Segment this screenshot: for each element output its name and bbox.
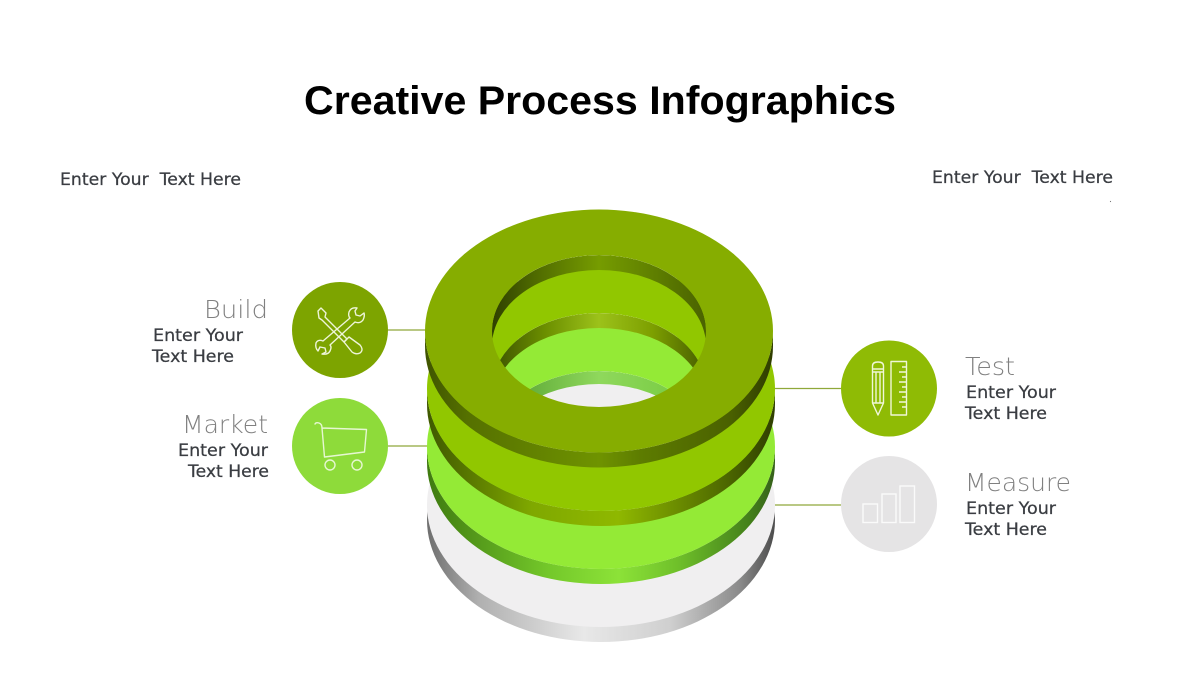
connector lines [388,330,841,505]
text: build description: Enter Your [153,326,243,346]
title: Creative Process Infographics [304,79,896,123]
text: measure description: Enter Your [966,499,1056,519]
icon: wrench and screwdriver [316,308,364,354]
text block: top left: Enter Your Text Here [60,170,241,190]
base disc: measure [427,383,775,642]
text: market description: Enter Your [178,441,268,461]
circle: build [292,282,388,378]
text: test description: Enter Your [966,383,1056,403]
ring one: build [425,209,773,468]
label: test: Test [965,352,1015,381]
text: test description [964,383,1056,424]
label: build: Build [204,295,268,324]
text: test description: Text Here [964,404,1047,424]
stacked ring diagram [425,209,775,642]
ring three: market [427,325,775,584]
circle: measure [841,456,937,552]
icon: shopping cart [315,423,366,470]
ring two: test [427,267,775,526]
circle: market [292,398,388,494]
label: measure: Measure [965,468,1071,497]
label: market: Market [182,410,268,439]
text: measure description: Text Here [964,520,1047,540]
text: market description: Text Here [187,462,269,482]
text block: top right: Enter Your Text Here [932,168,1113,188]
text: measure description [964,499,1056,540]
callout: test [841,340,1056,436]
text: build description: Text Here [151,347,234,367]
text: build description [151,326,243,367]
icon: bar chart [863,486,914,522]
tiny dot [1110,201,1111,202]
text: market description [178,441,269,482]
circle: test [841,340,937,436]
callout: build [151,282,388,378]
callout: measure [841,456,1071,552]
callout: market [178,398,388,494]
icon: pencil and ruler [872,362,906,415]
